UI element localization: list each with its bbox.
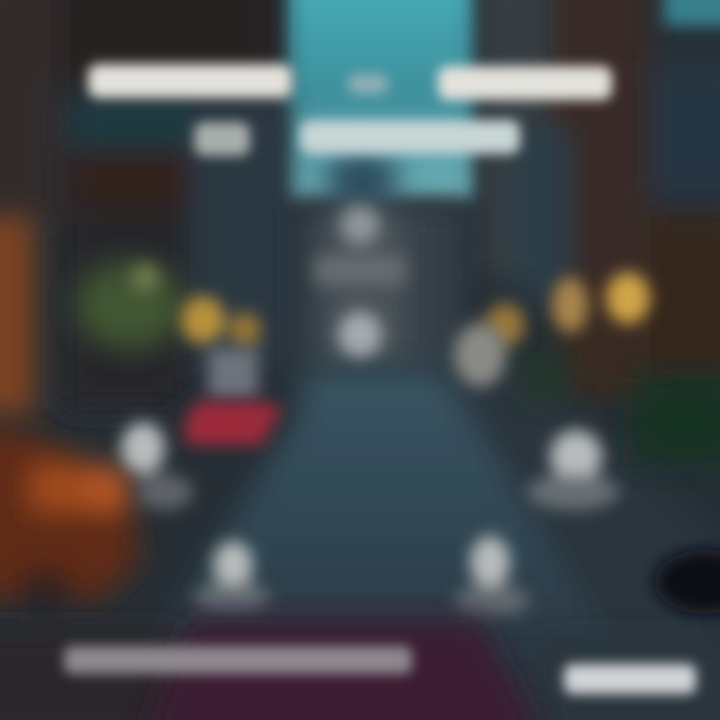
right bush	[521, 352, 720, 463]
sky	[284, 0, 476, 198]
central building highlights	[315, 205, 405, 359]
right buildings	[480, 0, 720, 400]
road	[0, 370, 720, 720]
street lights	[131, 264, 650, 348]
left tree	[75, 260, 185, 350]
orange car	[0, 420, 140, 610]
left buildings	[0, 0, 290, 410]
source label, illegible blurred lettering	[564, 664, 696, 694]
title, illegible blurred lettering	[88, 64, 612, 156]
left orange wall	[0, 215, 35, 415]
top right sky patch	[664, 0, 720, 26]
dark car at right edge	[655, 550, 720, 614]
central building	[300, 152, 460, 370]
building entrance glow	[208, 323, 506, 398]
caption, illegible blurred lettering	[64, 646, 412, 674]
pedestrian blobs	[121, 422, 619, 615]
red car	[182, 402, 282, 445]
foreground sidewalk	[0, 630, 720, 720]
maroon foreground car	[140, 620, 545, 720]
